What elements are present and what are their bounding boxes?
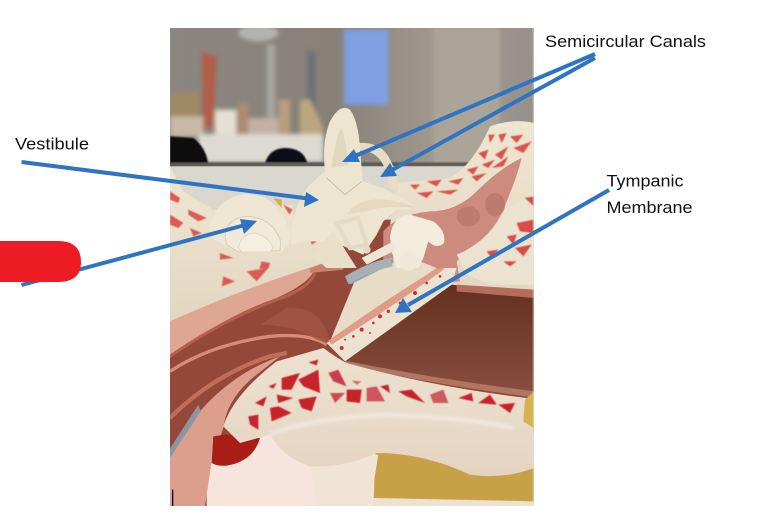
- tympanic membrane plate and ossicle base: [327, 255, 457, 361]
- arrow: tympanic membrane: [395, 190, 609, 313]
- label: Tympanic Membrane: [606, 172, 692, 217]
- vestibule and semicircular canals: [293, 108, 398, 273]
- white edge strip at right of photo: [533, 28, 534, 506]
- ear canal, lower chamber: [170, 268, 534, 448]
- arrow: semicircular canal two: [380, 58, 595, 177]
- cochlea: [209, 194, 290, 253]
- label: Tympanic Membrane: Tympanic: [606, 172, 684, 190]
- redaction block covering hidden label: [0, 241, 81, 282]
- blurred classroom background: [170, 25, 534, 506]
- arrow: vestibule: [22, 162, 319, 207]
- arrow: unlabelled cochlea: [22, 219, 257, 285]
- label: Tympanic Membrane: Membrane: [606, 198, 692, 217]
- label: Semicircular Canals: Semicircular Canals: [545, 32, 706, 51]
- label: Vestibule: Vestibule: [15, 134, 89, 154]
- panel: photo of inner ear model: [170, 25, 534, 506]
- ossicles model: [345, 215, 444, 284]
- arrow: semicircular canal one: [342, 54, 595, 162]
- lower bone and stem: [172, 348, 534, 506]
- right temporal bone with cavities: [383, 121, 534, 295]
- lower left muscle, vessel and tube: [170, 356, 387, 506]
- pink membrane cavity: [383, 158, 522, 288]
- right cavern: [343, 285, 534, 398]
- left temporal bone: [170, 166, 357, 325]
